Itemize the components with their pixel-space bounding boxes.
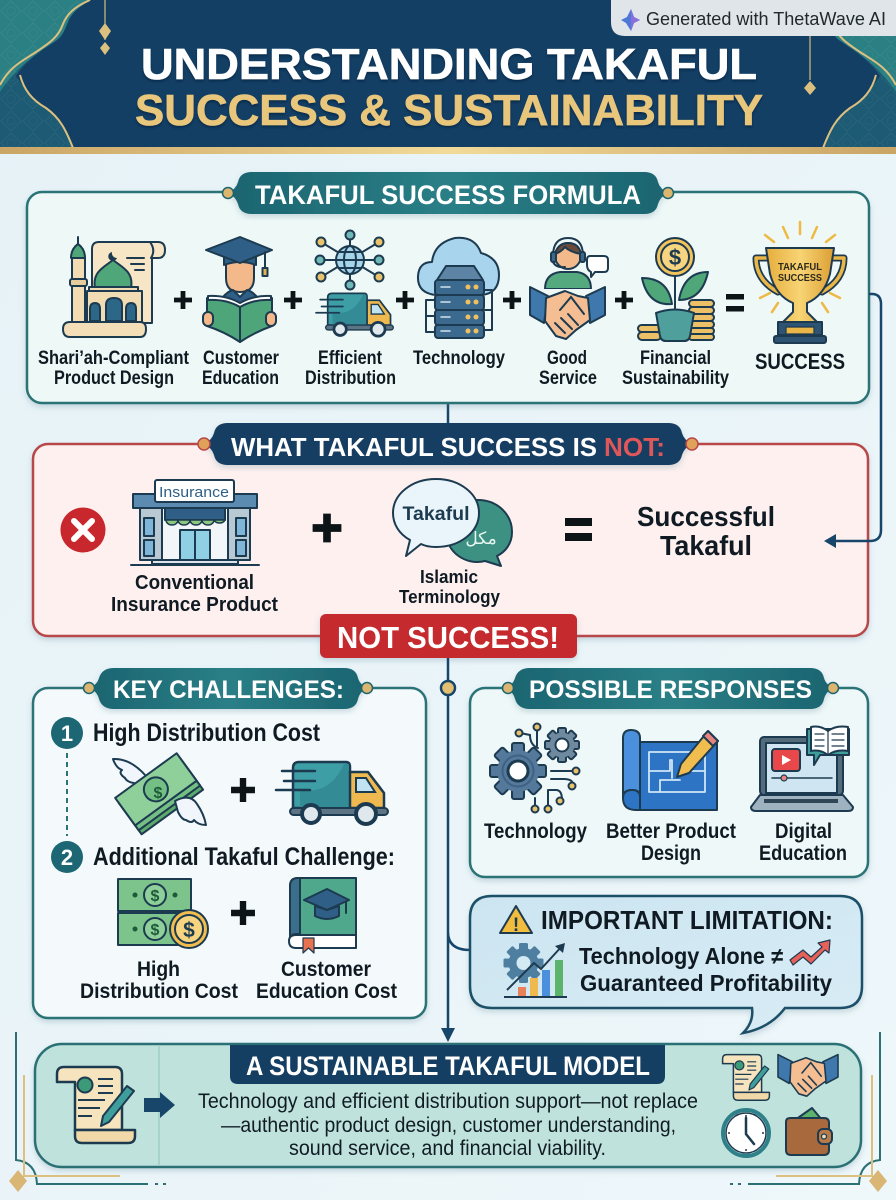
icon: plant and coins: $ xyxy=(669,245,681,270)
callout: not success: NOT SUCCESS! xyxy=(337,620,559,655)
panel: possible responses xyxy=(470,668,868,877)
formula labels: Efficient xyxy=(318,348,383,369)
title xyxy=(135,40,763,135)
heading: key challenges: KEY CHALLENGES: xyxy=(113,676,344,704)
heading: what takaful success is not xyxy=(198,423,698,465)
title: UNDERSTANDING TAKAFUL xyxy=(141,40,757,89)
plus xyxy=(231,901,255,925)
label: conventional insurance product: Insurance Product xyxy=(111,594,278,616)
formula labels: Distribution xyxy=(305,368,396,389)
icon: takaful speech bubbles xyxy=(393,479,512,566)
label: conventional insurance product xyxy=(111,572,278,616)
header banner xyxy=(0,0,896,154)
text: summary: Technology and efficient distribution support—not replace xyxy=(198,1090,698,1113)
labels: responses: Digital xyxy=(775,820,832,843)
formula labels: Education xyxy=(202,368,279,389)
watermark badge: Generated with ThetaWave AI xyxy=(646,9,886,29)
equals sign xyxy=(565,518,592,541)
labels: costs: Customer xyxy=(281,958,371,981)
heading: what takaful success is not: NOT: xyxy=(604,432,665,462)
label: islamic terminology: Terminology xyxy=(399,587,500,607)
icon: customer service agent handshake xyxy=(530,238,608,339)
heading: a sustainable takaful model: A SUSTAINABLE TAKAFUL MODEL xyxy=(246,1051,650,1081)
icon: signed document xyxy=(57,1067,135,1143)
callout: important limitation: ! xyxy=(513,915,519,936)
decorative bottom corners xyxy=(9,1032,887,1192)
formula labels: Shari’ah-Compliant xyxy=(38,348,190,369)
icon: flying money: $ xyxy=(154,785,163,802)
labels: responses: Better Product xyxy=(606,820,736,843)
icon: network globe and delivery truck xyxy=(316,230,393,336)
formula labels xyxy=(38,348,845,389)
icon: laptop with video lesson xyxy=(751,726,853,811)
icon: insurance building xyxy=(131,480,259,565)
equals sign xyxy=(726,294,744,312)
heading: takaful success formula xyxy=(222,172,674,214)
labels: costs: High xyxy=(137,958,180,981)
formula labels: Sustainability xyxy=(622,368,729,389)
icon: blueprint and pencil xyxy=(623,730,718,810)
text: technology alone not equal guaranteed profitability xyxy=(579,943,832,996)
icon: mosque and scroll xyxy=(63,237,165,337)
step 2: additional takaful challenge: 2 xyxy=(61,845,73,870)
heading: what takaful success is not: WHAT TAKAFUL SUCCESS IS xyxy=(231,432,597,462)
label: conventional insurance product: Conventional xyxy=(135,572,254,594)
panel: takaful success formula xyxy=(27,172,869,403)
plus xyxy=(396,291,414,309)
icon: cloud server xyxy=(418,238,499,338)
icon: gears and circuits xyxy=(490,724,580,812)
panel: key challenges xyxy=(33,668,426,1018)
icon: education book xyxy=(289,878,356,953)
plus xyxy=(503,291,521,309)
plus xyxy=(313,514,341,542)
step 1: high distribution cost: 1 xyxy=(61,721,73,746)
icon: success trophy: TAKAFUL xyxy=(778,261,823,273)
step 2: additional takaful challenge: Additional Takaful Challenge: xyxy=(93,843,395,871)
heading: possible responses: POSSIBLE RESPONSES xyxy=(529,676,812,704)
text: technology alone not equal guaranteed profitability: Technology Alone ≠ xyxy=(579,943,783,969)
formula labels: Product Design xyxy=(54,368,174,389)
icon: flying money xyxy=(113,753,206,834)
icon: banknotes and coin: $ xyxy=(183,919,195,942)
plus xyxy=(615,291,633,309)
heading: a sustainable takaful model xyxy=(230,1045,665,1084)
plus xyxy=(231,778,255,802)
icon: small handshake xyxy=(778,1055,838,1096)
icon: success trophy: SUCCESS xyxy=(778,272,822,284)
icon: graduate reading book xyxy=(203,237,276,342)
icon: plant and coins xyxy=(638,238,714,341)
step 2: additional takaful challenge xyxy=(51,841,395,873)
label: successful takaful: Takaful xyxy=(660,530,752,561)
labels: responses: Education xyxy=(759,842,847,865)
formula labels: Service xyxy=(539,368,597,389)
text: technology alone not equal guaranteed profitability: Guaranteed Profitability xyxy=(580,970,832,996)
label: islamic terminology: Islamic xyxy=(420,567,478,587)
plus xyxy=(284,291,302,309)
heading: important limitation: IMPORTANT LIMITATION: xyxy=(541,905,833,935)
icon: banknotes and coin xyxy=(118,879,208,948)
arrow: formula to successful takaful xyxy=(824,294,881,548)
formula labels: Technology xyxy=(413,348,505,369)
text: summary xyxy=(198,1090,698,1160)
plus xyxy=(174,291,192,309)
formula labels: Good xyxy=(547,348,587,369)
icon: red x xyxy=(60,508,106,552)
icon: takaful speech bubbles: Takaful xyxy=(402,504,470,525)
labels: responses: Design xyxy=(641,842,701,865)
labels: costs: Education Cost xyxy=(256,980,397,1003)
label: successful takaful xyxy=(637,501,775,561)
panel: what takaful success is not xyxy=(33,423,868,658)
icon: red rising arrow xyxy=(790,940,830,965)
labels: costs: Distribution Cost xyxy=(80,980,238,1003)
labels: responses: Technology xyxy=(484,820,587,843)
step 1: high distribution cost: High Distribution Cost xyxy=(93,719,321,747)
icon: banknotes and coin: $ xyxy=(151,888,160,905)
icon: banknotes and coin: $ xyxy=(151,922,160,939)
panel: a sustainable takaful model xyxy=(35,1044,861,1167)
icon: delivery truck xyxy=(276,762,388,824)
labels: responses xyxy=(484,820,847,865)
icon: gear and bar chart xyxy=(504,943,567,997)
heading: possible responses xyxy=(502,668,838,709)
callout: important limitation xyxy=(470,896,862,1033)
formula labels: Financial xyxy=(640,348,711,369)
icon: success trophy xyxy=(756,222,844,343)
heading: takaful success formula: TAKAFUL SUCCESS FORMULA xyxy=(255,180,641,210)
icon: insurance building: Insurance xyxy=(159,484,229,501)
arrow: to text xyxy=(144,1092,175,1118)
text: summary: sound service, and financial viability. xyxy=(289,1137,606,1160)
connector: formula to not panel xyxy=(447,403,449,425)
heading: key challenges xyxy=(84,668,372,709)
label: successful takaful: Successful xyxy=(637,501,775,532)
formula labels: SUCCESS xyxy=(755,349,845,374)
icon: clock xyxy=(723,1110,769,1156)
labels: costs xyxy=(80,958,397,1003)
step 1: high distribution cost xyxy=(51,717,321,749)
text: summary: —authentic product design, customer understanding, xyxy=(221,1114,676,1137)
icon: takaful speech bubbles: مكل xyxy=(465,529,497,549)
formula labels: Customer xyxy=(203,348,280,369)
arrow: central connector xyxy=(441,658,470,1042)
icon: wallet xyxy=(786,1108,832,1155)
icon: small document xyxy=(723,1055,769,1100)
title: SUCCESS & SUSTAINABILITY xyxy=(135,86,763,135)
icon: warning triangle xyxy=(500,906,532,933)
label: islamic terminology xyxy=(399,567,500,607)
watermark badge xyxy=(611,0,896,36)
